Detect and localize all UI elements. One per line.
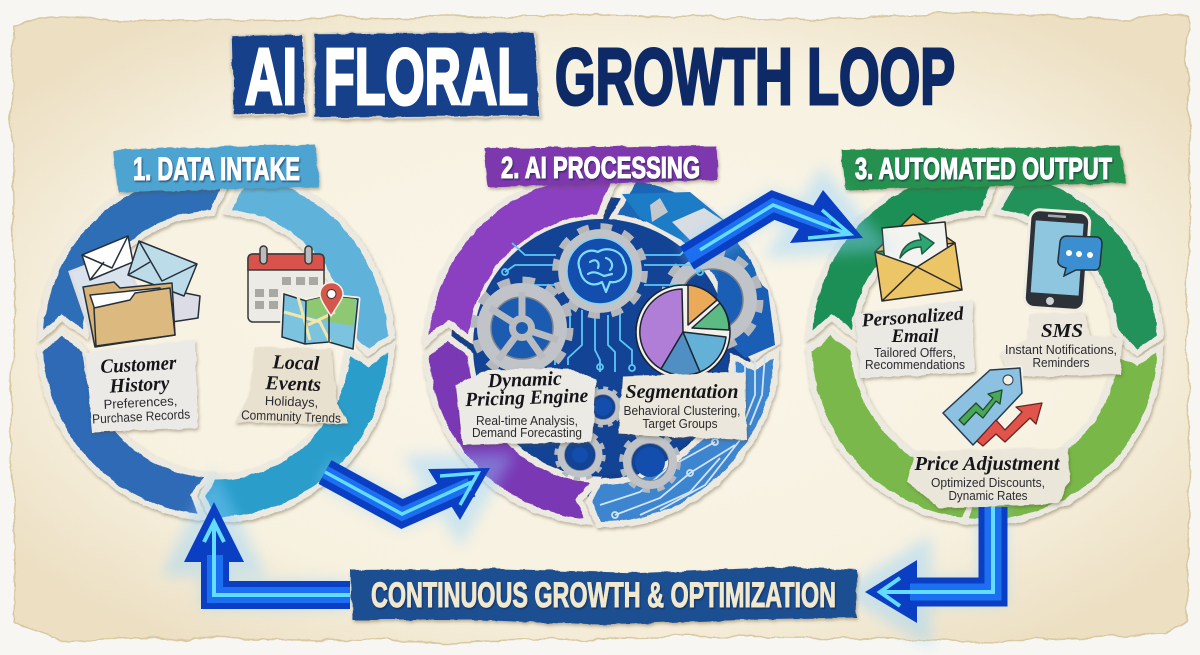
section 2: AI processing ring [426, 173, 777, 525]
note: customer history: History [108, 372, 170, 398]
note: customer history: Preferences, [103, 393, 178, 412]
gear: left [476, 282, 568, 374]
note: sms: Reminders [1032, 355, 1090, 370]
note: segmentation: Segmentation [626, 381, 738, 403]
note: price adjustment: Optimized Discounts, [931, 475, 1045, 490]
icon: email envelope [875, 214, 962, 301]
ring arrows [40, 168, 391, 520]
note: sms: Instant Notifications, [1005, 342, 1117, 357]
note: price adjustment: Price Adjustment [913, 453, 1061, 475]
note: segmentation [618, 372, 747, 440]
title [231, 32, 955, 121]
note: customer history: Purchase Records [92, 406, 191, 427]
note: dynamic pricing engine: Demand Forecasting [472, 425, 582, 440]
arrow: data intake to AI processing [325, 468, 490, 520]
section 1: data intake ring [40, 168, 391, 520]
arrow: banner back to data intake [184, 502, 350, 595]
arrow: output to banner [865, 507, 993, 623]
note: local events: Community Trends [241, 407, 342, 426]
title word: AI: AI [245, 32, 297, 121]
banner: continuous growth and optimization: CONTINUOUS GROWTH & OPTIMIZATION [371, 576, 836, 615]
note: sms [1000, 313, 1123, 377]
note: price adjustment [907, 448, 1070, 508]
gear behind pie [666, 254, 758, 346]
circuit disc [451, 197, 751, 497]
note: price adjustment: Dynamic Rates [948, 488, 1028, 503]
ring arrows [426, 173, 777, 525]
header: data intake [113, 144, 320, 192]
note: segmentation: Behavioral Clustering, [624, 403, 740, 418]
note: local events: Holidays, [265, 393, 319, 410]
title word: FLORAL: FLORAL [324, 32, 528, 121]
note: personalized email: Personalized [860, 303, 965, 332]
note: segmentation: Target Groups [642, 416, 718, 431]
icon: calendar and map [248, 246, 358, 349]
title patch: AI [231, 34, 306, 115]
gear: center with brain [557, 228, 643, 314]
note: customer history [85, 340, 198, 432]
circuit traces [502, 240, 703, 372]
title words: GROWTH LOOP: GROWTH LOOP [555, 32, 955, 121]
note: local events: Events [264, 372, 322, 396]
note: personalized email: Tailored Offers, [874, 345, 956, 360]
note: dynamic pricing engine: Real-time Analysis, [476, 413, 578, 428]
section 3: automated output ring [809, 168, 1160, 522]
arrow: AI processing to automated output [687, 190, 863, 258]
note: dynamic pricing engine: Pricing Engine [464, 385, 589, 411]
note: personalized email: Email [891, 326, 939, 347]
note: sms: SMS [1041, 320, 1083, 342]
banner: continuous growth and optimization [351, 567, 857, 625]
header: AI processing [484, 146, 718, 187]
header: data intake: 1. DATA INTAKE [133, 151, 300, 187]
ring arrows [809, 168, 1160, 522]
note: local events: Local [271, 351, 320, 375]
note: personalized email: Recommendations [865, 357, 965, 372]
header: AI processing: 2. AI PROCESSING [501, 150, 700, 185]
chart: pie icon [636, 285, 730, 379]
icon: price tag with arrows [943, 368, 1042, 446]
inner disc [473, 219, 729, 475]
small gears [557, 389, 678, 490]
chevrons and circuit board lower right [600, 355, 765, 518]
icon: envelopes and folder [70, 236, 200, 347]
icon: phone with sms bubble [1024, 209, 1102, 311]
icon: brain [579, 249, 626, 292]
note: dynamic pricing engine: Dynamic [486, 368, 562, 392]
note: local events [234, 347, 348, 426]
header: automated output [841, 146, 1126, 190]
note: customer history: Customer [100, 352, 177, 378]
note: personalized email [855, 300, 975, 378]
title patch: FLORAL [314, 32, 540, 118]
collage fragments top right [622, 192, 775, 358]
note: dynamic pricing engine [456, 368, 596, 445]
